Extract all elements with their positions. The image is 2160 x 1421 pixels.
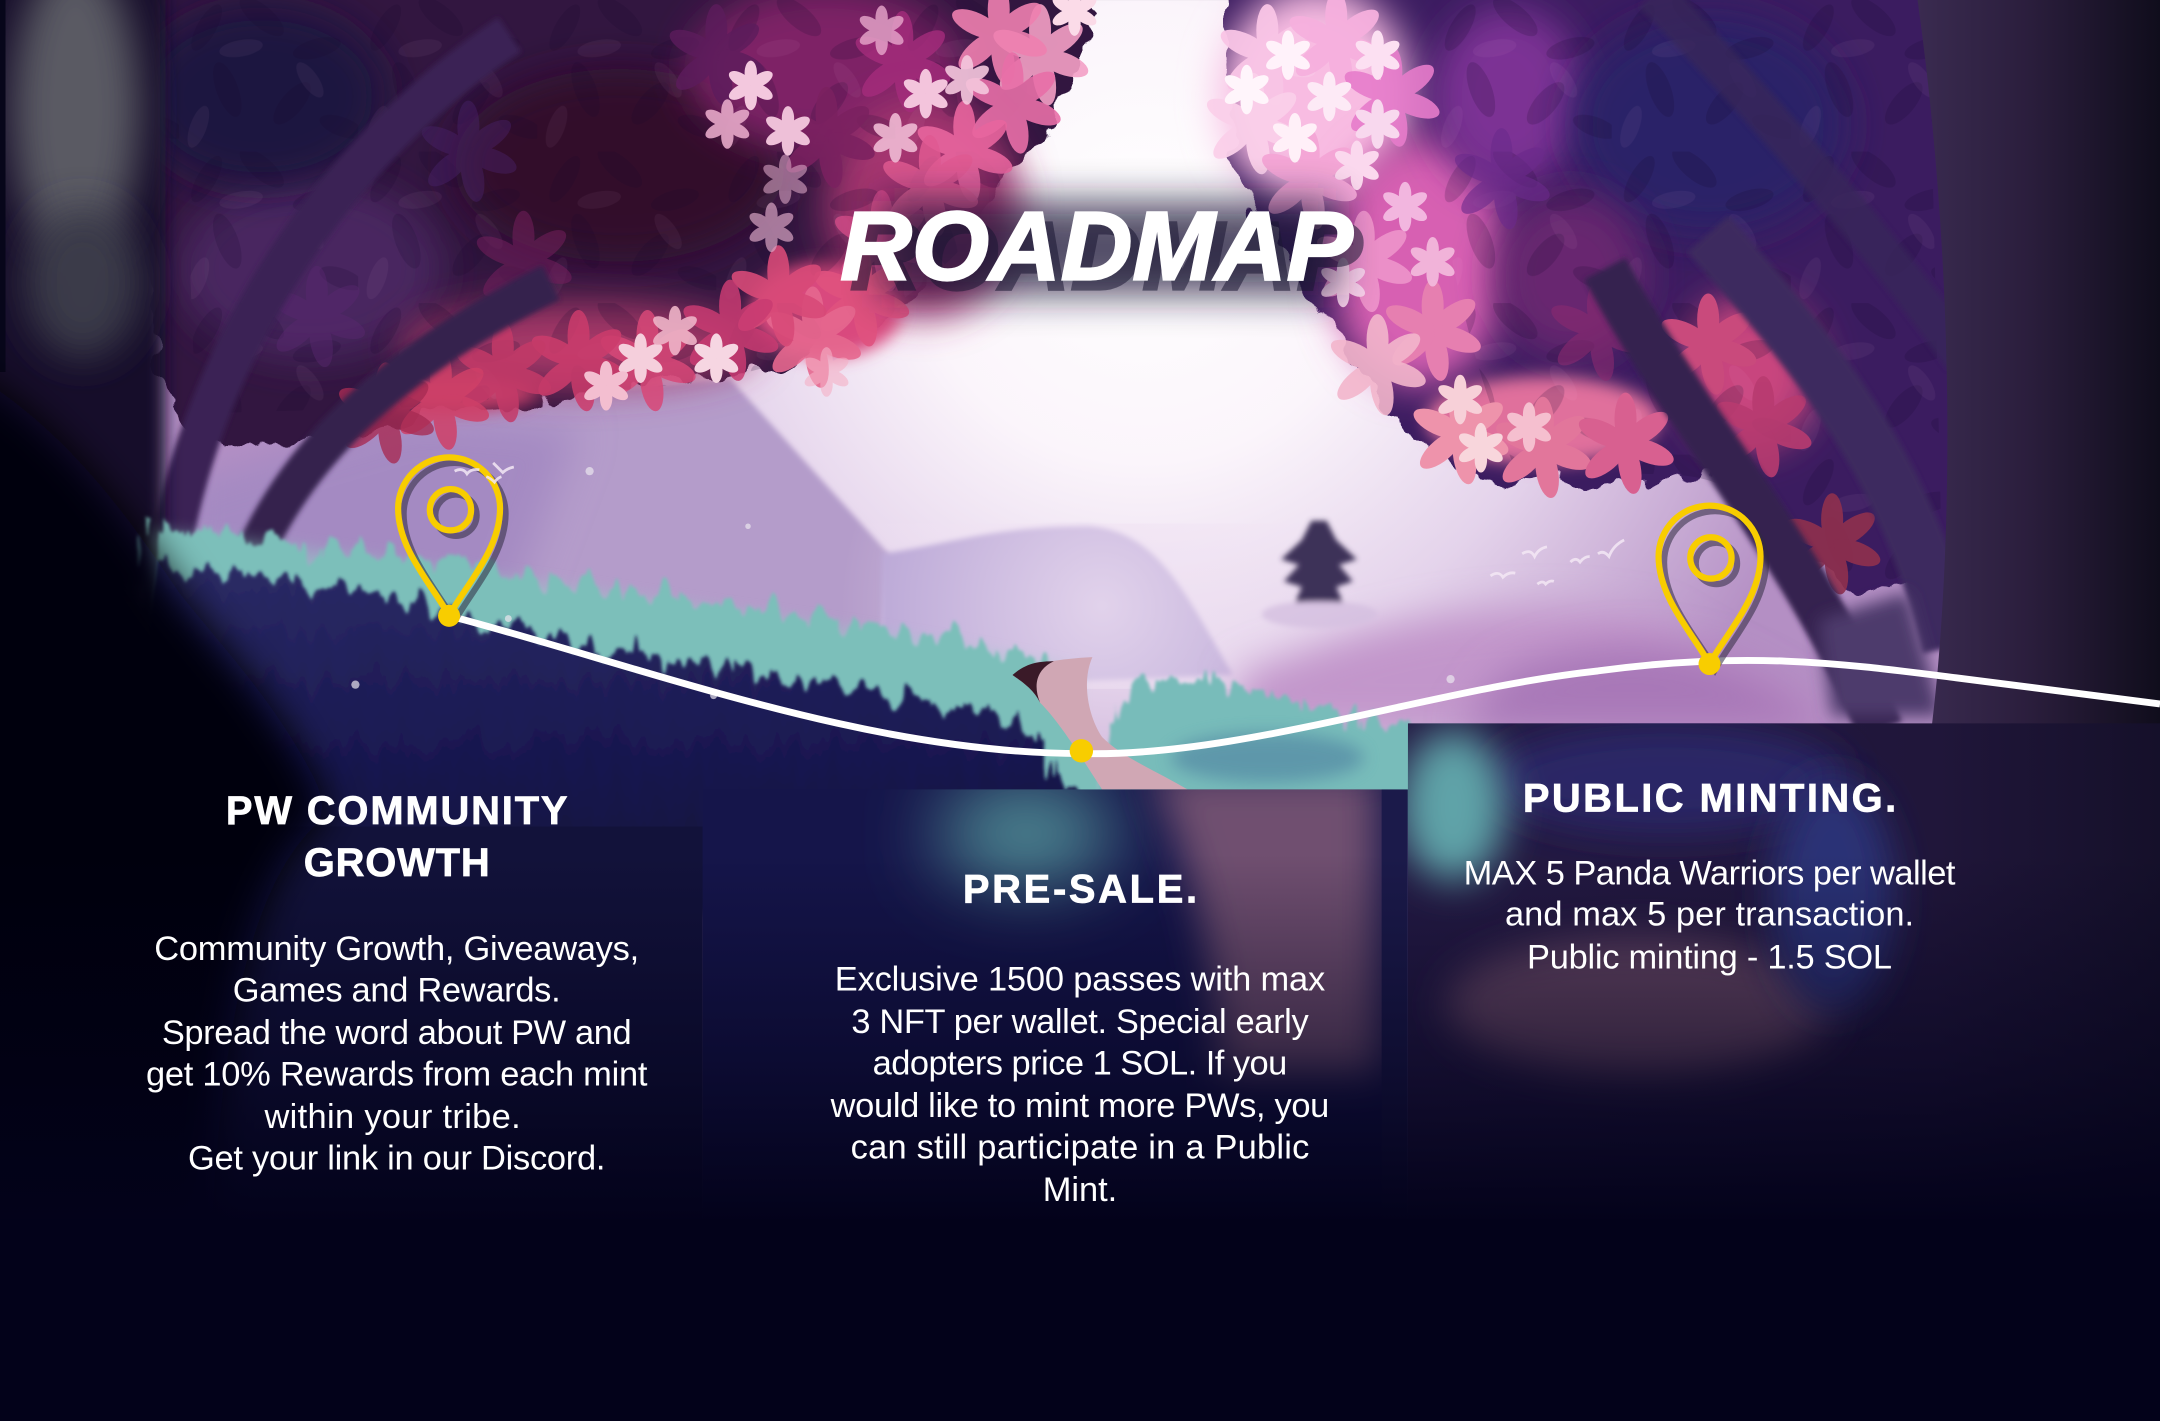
right large trunk: [1918, 0, 2160, 730]
right leaf texture: [1430, 0, 1942, 592]
text: public minting: [1464, 776, 1956, 976]
text: public minting: Public minting - 1.5 SOL: [1527, 938, 1892, 976]
right pink leaves: [1203, 0, 1884, 596]
text: community growth: Get your link in our Discord.: [188, 1140, 605, 1178]
text: community growth: [146, 789, 648, 1178]
text: pre-sale: can still participate in a Public: [851, 1129, 1309, 1167]
text: pre-sale: Mint.: [1043, 1171, 1117, 1209]
bottom fade: [0, 854, 2160, 1226]
text: pre-sale: adopters price 1 SOL. If you: [873, 1045, 1287, 1083]
text: pre-sale: 3 NFT per wallet. Special early: [851, 1003, 1309, 1041]
birds: [455, 463, 1624, 584]
text: community growth: Games and Rewards.: [233, 972, 561, 1010]
text: pre-sale: [830, 867, 1329, 1209]
text: pre-sale: would like to mint more PWs, you: [830, 1087, 1329, 1125]
panel 2 background: [702, 789, 1408, 1208]
panel 1 background: [138, 827, 703, 1226]
left pink leaves: [266, 0, 1099, 465]
route line: [449, 616, 2160, 754]
text: community growth: Spread the word about PW and: [162, 1014, 632, 1052]
floating light specks: [351, 467, 1455, 699]
grass hill: [152, 523, 1419, 909]
text: community growth: get 10% Rewards from each mint: [146, 1056, 648, 1094]
title: ROADMAP: [850, 200, 1363, 310]
text: community growth: within your tribe.: [263, 1098, 521, 1136]
pagoda silhouette: [1262, 521, 1378, 628]
left dark foreground: [0, 358, 331, 1421]
title: ROADMAP: [840, 191, 1354, 301]
left canopy: [117, 0, 1099, 465]
text: public minting: and max 5 per transaction.: [1505, 896, 1914, 934]
dirt path: [1012, 657, 1187, 789]
pin: public minting: [1659, 506, 1766, 675]
left leaf texture: [152, 0, 1083, 413]
right canopy: [1203, 0, 1984, 596]
pin: community growth: [398, 457, 506, 627]
mountains: [165, 379, 1846, 730]
text: community growth: PW COMMUNITY: [226, 789, 568, 833]
text: public minting: MAX 5 Panda Warriors per wallet: [1464, 854, 1956, 892]
tree trunks: [163, 0, 1963, 730]
text: community growth: Community Growth, Giveaways,: [154, 930, 639, 968]
text: public minting: PUBLIC MINTING.: [1523, 776, 1896, 820]
text: pre-sale: Exclusive 1500 passes with max: [835, 960, 1325, 998]
left dark edge with grey haze: [0, 0, 165, 592]
text: community growth: GROWTH: [304, 841, 490, 885]
milestone dot: pre-sale: [1070, 739, 1093, 763]
panel 3 background: [1408, 723, 2160, 1208]
text: pre-sale: PRE-SALE.: [963, 867, 1197, 911]
